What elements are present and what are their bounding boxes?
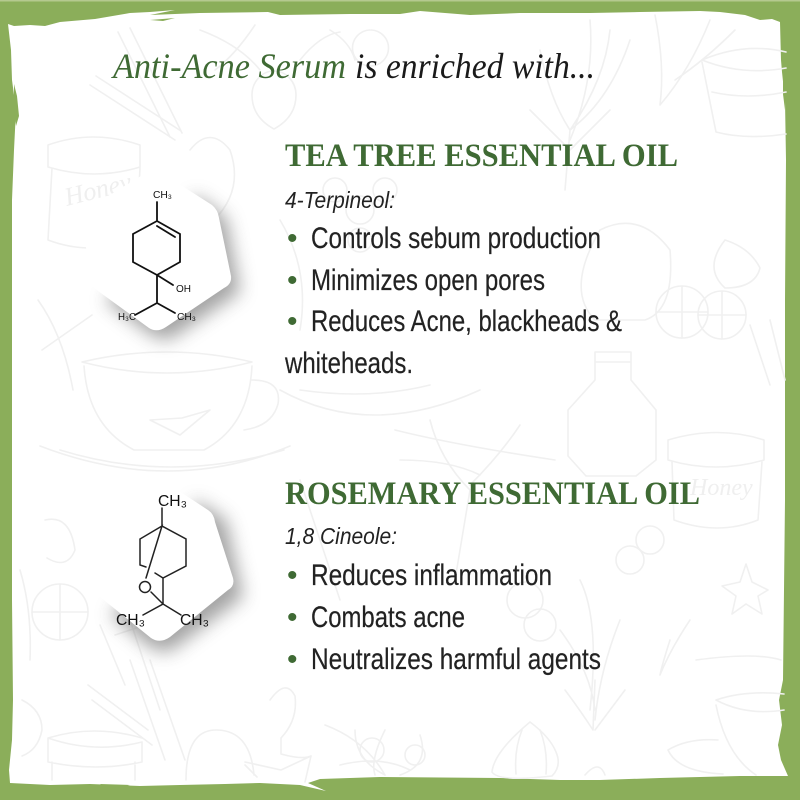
doodle: herb bunch center [300,420,620,720]
compound name: 1,8 Cineole: [285,523,397,549]
molecule: 4-terpineol: H₃C [118,311,136,323]
doodle: honey jar top left: Honey [60,167,135,212]
bullet list: • [287,264,298,297]
bullet list: whiteheads. [284,347,413,380]
doodle: honey jar top left [48,137,140,248]
doodle: lemon left [20,519,175,710]
molecule: 1,8 cineole: CH₃ [116,612,145,629]
doodle: sprig top [200,25,388,129]
panel: rosemary molecule [84,476,243,651]
doodle: rosemary top right [530,15,735,190]
hexagon card [84,168,231,330]
compound name: 4-Terpineol: [285,187,395,213]
bullet list: Reduces inflammation [311,559,552,592]
card shadow [110,500,243,651]
bullet list: Neutralizes harmful agents [311,643,601,676]
doodle: spoon and herb [38,138,480,415]
bullet list: • [287,643,298,676]
molecule: 4-terpineol: CH₃ [177,311,196,323]
doodle: cinnamon sticks bottom [88,660,185,760]
doodle: left-edge cup [22,700,42,756]
doodle: flower [323,178,397,252]
molecule: 1,8 cineole: CH₃ [180,612,209,629]
doodle: pestle and mortar [245,688,311,782]
heading: ROSEMARY ESSENTIAL OIL [285,476,700,512]
bullet list: Combats acne [311,601,465,634]
molecule: 1,8 cineole [116,493,209,629]
bullet list: • [287,559,298,592]
doodle: cinnamon sticks top left [90,28,182,140]
doodle: fig and garlic [492,722,605,778]
molecule: 4-terpineol: OH [176,283,191,295]
bullet list: • [287,222,298,255]
molecule: 4-terpineol [118,189,196,323]
hexagon card [84,476,233,641]
doodle: jar bottom left [48,730,254,780]
doodle: bushy herb [325,725,425,775]
title: is enriched with... [355,46,595,86]
doodle: herb bottom right [565,620,690,730]
bullet list: Minimizes open pores [311,264,545,297]
doodle: bowl bottom right [668,656,784,775]
panel: tea tree molecule [84,168,240,339]
bullet list: • [287,305,298,338]
text block: tea tree essential oil [284,138,678,380]
doodle: honey jar right: Honey [689,475,753,501]
text block: rosemary essential oil [285,476,700,676]
doodle: cup top right [702,48,786,137]
bullet list [287,559,601,676]
bullet list: Controls sebum production [311,222,601,255]
doodle: teacup [40,352,290,471]
heading: TEA TREE ESSENTIAL OIL [285,138,678,174]
bullet list [284,222,622,380]
bullet list: • [287,601,298,634]
top highlight strip [0,0,800,2]
molecule: 4-terpineol: CH₃ [153,189,172,201]
doodle: star anise and berries [507,526,768,641]
doodle: bottle [568,223,671,476]
doodle: honey jar right [668,432,764,528]
doodle: citrus slices [656,240,785,385]
title [111,46,595,86]
card shadow [105,195,240,339]
title: Anti-Acne Serum [111,46,346,86]
molecule: 1,8 cineole: CH₃ [158,493,187,510]
bullet list: Reduces Acne, blackheads & [311,305,622,338]
